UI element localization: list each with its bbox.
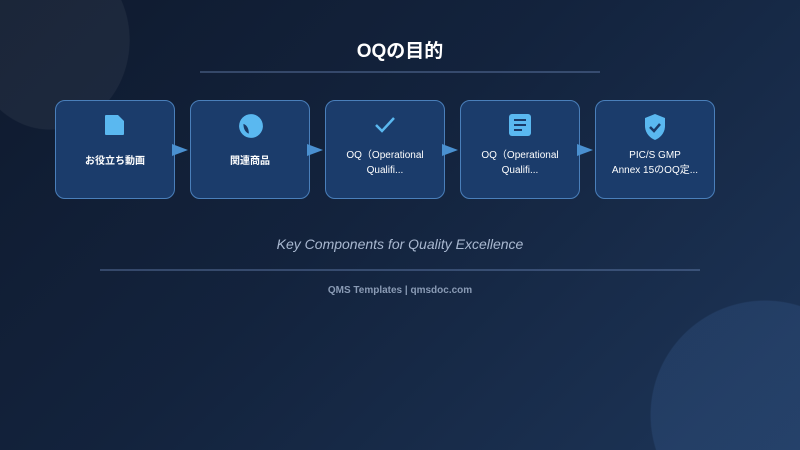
icon: globe [239, 114, 263, 138]
step 5 [595, 100, 715, 199]
step 1: お役立ち動画 [85, 156, 145, 167]
icon: shield [645, 114, 665, 140]
subtitle: Key Components for Quality Excellence [277, 236, 523, 252]
step 4 [460, 100, 580, 199]
arrow 4 [577, 144, 593, 156]
step 3: Qualifi... [367, 165, 403, 176]
step 1 [55, 100, 175, 199]
icon: text document [509, 114, 531, 136]
step 4: Qualifi... [502, 165, 538, 176]
icon: document [105, 115, 124, 135]
title: OQの目的 [357, 41, 443, 62]
step 5: PIC/S GMP [629, 150, 681, 161]
icon: check [375, 117, 395, 133]
step 3: OQ（Operational [346, 150, 424, 161]
step 3 [325, 100, 445, 199]
arrow 1 [172, 144, 188, 156]
step 5: Annex 15のOQ定... [612, 165, 698, 176]
arrow 3 [442, 144, 458, 156]
arrow 2 [307, 144, 323, 156]
step 2: 関連商品 [230, 156, 270, 167]
step 4: OQ（Operational [481, 150, 559, 161]
step 2 [190, 100, 310, 199]
footer: QMS Templates | qmsdoc.com [328, 285, 472, 296]
